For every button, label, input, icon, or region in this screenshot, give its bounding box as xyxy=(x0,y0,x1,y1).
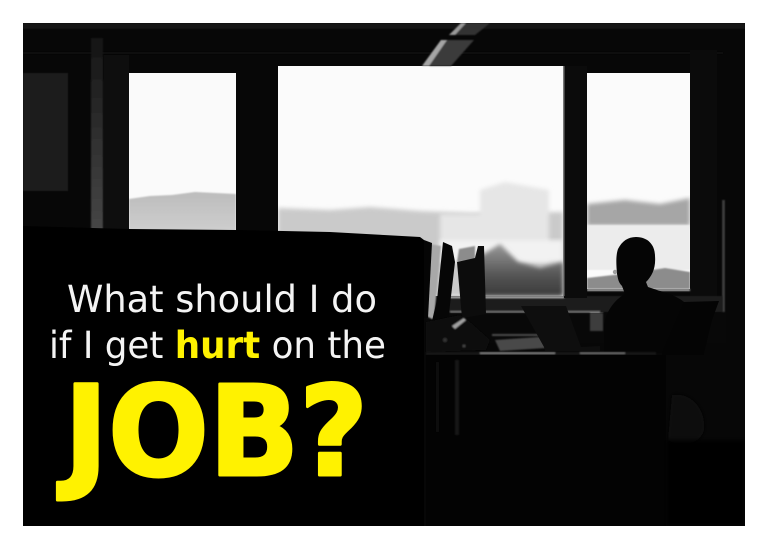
left window xyxy=(129,73,236,240)
heading line one: What should I do xyxy=(67,278,377,321)
sky xyxy=(587,73,690,289)
lower haze xyxy=(440,240,563,262)
chair base xyxy=(668,395,704,444)
black title panel xyxy=(23,226,424,526)
right frame highlight xyxy=(722,200,725,312)
window mullion xyxy=(564,288,587,298)
dim wall panel xyxy=(23,73,68,191)
heading line two: if I get hurt on the xyxy=(49,324,386,367)
front monitor top xyxy=(457,246,475,262)
heading big word: JOB? xyxy=(56,360,368,505)
buildings xyxy=(587,225,690,270)
window frame left band xyxy=(104,55,129,230)
back monitor body xyxy=(424,240,432,318)
tree line xyxy=(587,198,690,226)
lower wall xyxy=(450,313,604,332)
left pillar highlight xyxy=(91,38,103,230)
office chair xyxy=(684,301,719,312)
ceiling light fixtures xyxy=(422,23,490,66)
trees xyxy=(484,242,563,296)
mullion left highlight xyxy=(563,66,564,296)
middle monitor xyxy=(431,242,455,325)
hills xyxy=(129,192,236,230)
distant hills xyxy=(278,207,563,296)
laptop xyxy=(521,306,568,348)
window frame right band xyxy=(690,50,717,312)
desk top highlight xyxy=(426,352,656,355)
window sill strips xyxy=(440,289,722,331)
center window xyxy=(278,66,563,296)
pale buildings xyxy=(439,182,550,242)
front monitor xyxy=(457,246,486,318)
floor xyxy=(666,440,745,526)
ceiling trim xyxy=(24,24,744,28)
back monitor highlight xyxy=(426,244,441,320)
foreground shrubs xyxy=(587,268,690,289)
sky xyxy=(278,66,563,296)
right window xyxy=(587,73,690,289)
desk drawers xyxy=(436,360,459,435)
lower right wall shade xyxy=(666,355,745,526)
monitors xyxy=(424,240,486,325)
glasses xyxy=(613,270,617,274)
desk body xyxy=(426,355,666,526)
desk clutter and papers xyxy=(442,317,544,352)
sky xyxy=(129,73,236,238)
heading xyxy=(49,278,386,505)
person silhouette xyxy=(608,237,684,312)
